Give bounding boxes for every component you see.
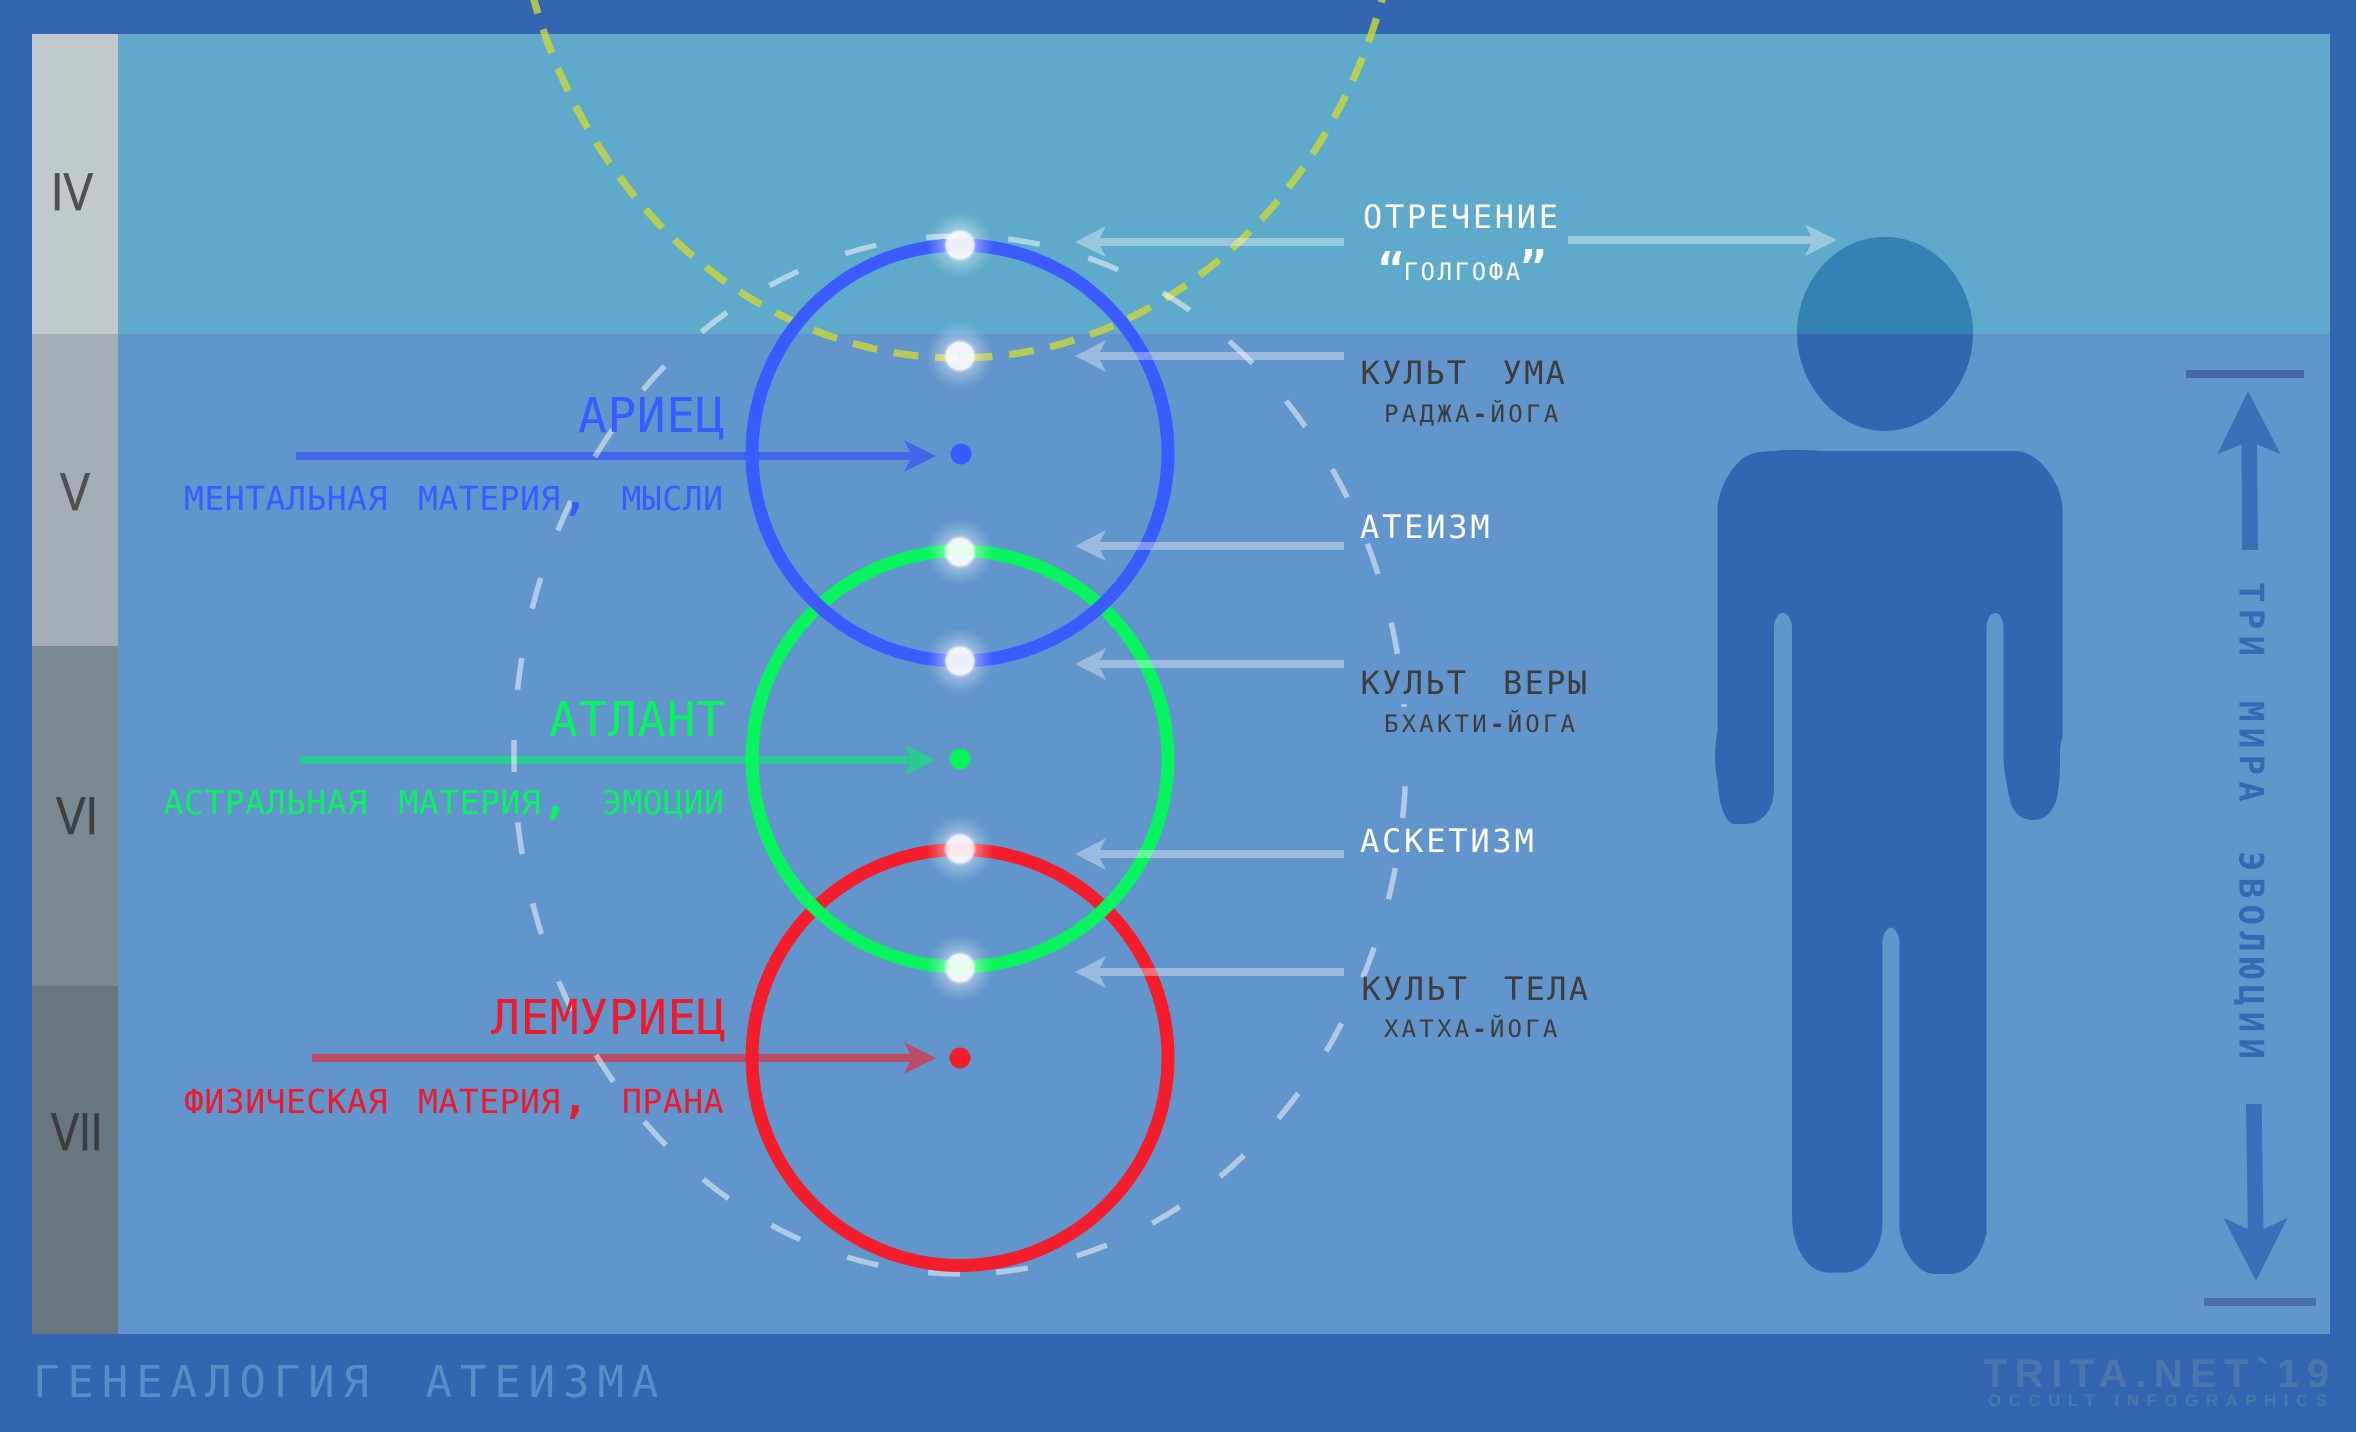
- evolution scale bottom tick: [2204, 1298, 2316, 1306]
- label: Lemurian: ,: [562, 1073, 589, 1124]
- arrow: cult of body: [1075, 956, 1344, 988]
- white dashed ellipse: [514, 236, 1406, 1274]
- label: renunciation, Golgotha: [1363, 198, 1561, 295]
- arrow: cult of mind: [1075, 340, 1344, 372]
- label: Lemurian: [184, 990, 726, 1124]
- title: АТЕИЗМА: [426, 1357, 666, 1408]
- label: cult of mind: УМА: [1502, 354, 1567, 392]
- arrow: renunciation: [1075, 226, 1344, 257]
- label: Atlantean: АТЛАНТ: [549, 692, 725, 748]
- label: renunciation, Golgotha: ГОЛГОФА: [1404, 258, 1523, 286]
- credit: OCCULT INFOGRAPHICS: [1988, 1391, 2327, 1410]
- label: Aryan: АРИЕЦ: [578, 388, 725, 444]
- label: renunciation, Golgotha: ”: [1520, 242, 1546, 293]
- label: Lemurian: МАТЕРИЯ: [418, 1082, 561, 1121]
- arrow: cult of faith: [1075, 648, 1344, 680]
- label: cult of faith: БХАКТИ-ЙОГА: [1384, 709, 1578, 738]
- label: cult of body: [1362, 970, 1590, 1043]
- arrow: to the head: [1568, 224, 1837, 256]
- label: Atlantean: МАТЕРИЯ: [398, 783, 541, 822]
- figure head: [1797, 237, 1973, 431]
- evolution arrow down: [2224, 1104, 2288, 1281]
- evolution arrow up: [2218, 391, 2280, 550]
- label: Lemurian: ПРАНА: [622, 1082, 724, 1121]
- yellow dashed arc: [512, 0, 1404, 358]
- band VII: [32, 986, 118, 1334]
- vertical label: ТРИ: [2230, 582, 2270, 662]
- label: cult of faith: [1360, 664, 1589, 738]
- vertical label: МИРА: [2230, 701, 2270, 808]
- label: cult of mind: [1360, 354, 1567, 428]
- band VII: VII: [51, 1103, 102, 1162]
- band VI: [32, 646, 118, 986]
- band IV: IV: [51, 163, 94, 222]
- label: Aryan: МЫСЛИ: [622, 479, 724, 518]
- label: cult of mind: КУЛЬТ: [1360, 354, 1468, 392]
- green circle: [752, 551, 1168, 967]
- green ray arrow: [300, 744, 936, 776]
- label: Atlantean: [164, 692, 725, 825]
- red circle: [752, 850, 1168, 1266]
- label: Aryan: МАТЕРИЯ: [418, 479, 561, 518]
- label: Atlantean: ЭМОЦИИ: [602, 783, 724, 822]
- label: cult of body: ХАТХА-ЙОГА: [1384, 1014, 1561, 1043]
- red ray arrow: [312, 1042, 936, 1074]
- title: ГЕНЕАЛОГИЯ: [33, 1357, 377, 1408]
- blue centre dot: [950, 444, 972, 464]
- label: atheism: АТЕИЗМ: [1360, 508, 1492, 546]
- label: Atlantean: ,: [542, 774, 569, 825]
- label: cult of body: ТЕЛА: [1504, 970, 1590, 1008]
- band IV: [32, 34, 118, 334]
- label: renunciation, Golgotha: “: [1378, 244, 1404, 295]
- green centre dot: [950, 748, 970, 770]
- bakhti label backing: [1380, 707, 1595, 736]
- band V: V: [60, 463, 91, 522]
- label: cult of body: КУЛЬТ: [1362, 970, 1469, 1008]
- vertical label: ЭВОЛЮЦИИ: [2230, 851, 2270, 1065]
- band V: [32, 334, 118, 646]
- label: Atlantean: АСТРАЛЬНАЯ: [164, 783, 367, 822]
- label: Aryan: МЕНТАЛЬНАЯ: [184, 479, 388, 518]
- panel: upper band: [118, 34, 2330, 334]
- panel: roman numeral column: [32, 34, 118, 1334]
- arrow: atheism: [1075, 530, 1344, 561]
- glowing white points: [926, 211, 994, 1002]
- label: Lemurian: ЛЕМУРИЕЦ: [491, 990, 726, 1046]
- label: renunciation, Golgotha: ОТРЕЧЕНИЕ: [1363, 198, 1561, 236]
- label: cult of faith: КУЛЬТ: [1360, 664, 1468, 702]
- figure body: [1715, 450, 2063, 1274]
- label: Aryan: [184, 388, 725, 521]
- panel: lower band: [118, 334, 2330, 1334]
- human figure silhouette: [1715, 237, 2063, 1274]
- arrow: asceticism: [1075, 838, 1344, 870]
- band VI: VI: [56, 787, 98, 846]
- pointer arrows to points: [1075, 224, 1837, 988]
- label: cult of mind: РАДЖА-ЙОГА: [1384, 399, 1562, 428]
- evolution scale top tick: [2186, 370, 2304, 378]
- label: asceticism: АСКЕТИЗМ: [1360, 822, 1537, 860]
- blue circle: [752, 245, 1168, 661]
- label: cult of faith: ВЕРЫ: [1503, 664, 1589, 702]
- red centre dot: [950, 1048, 970, 1068]
- blue ray arrow: [296, 440, 936, 472]
- label: Aryan: ,: [562, 470, 589, 521]
- credit: TRITA.NET`19: [1983, 1352, 2329, 1396]
- label: Lemurian: ФИЗИЧЕСКАЯ: [184, 1082, 388, 1121]
